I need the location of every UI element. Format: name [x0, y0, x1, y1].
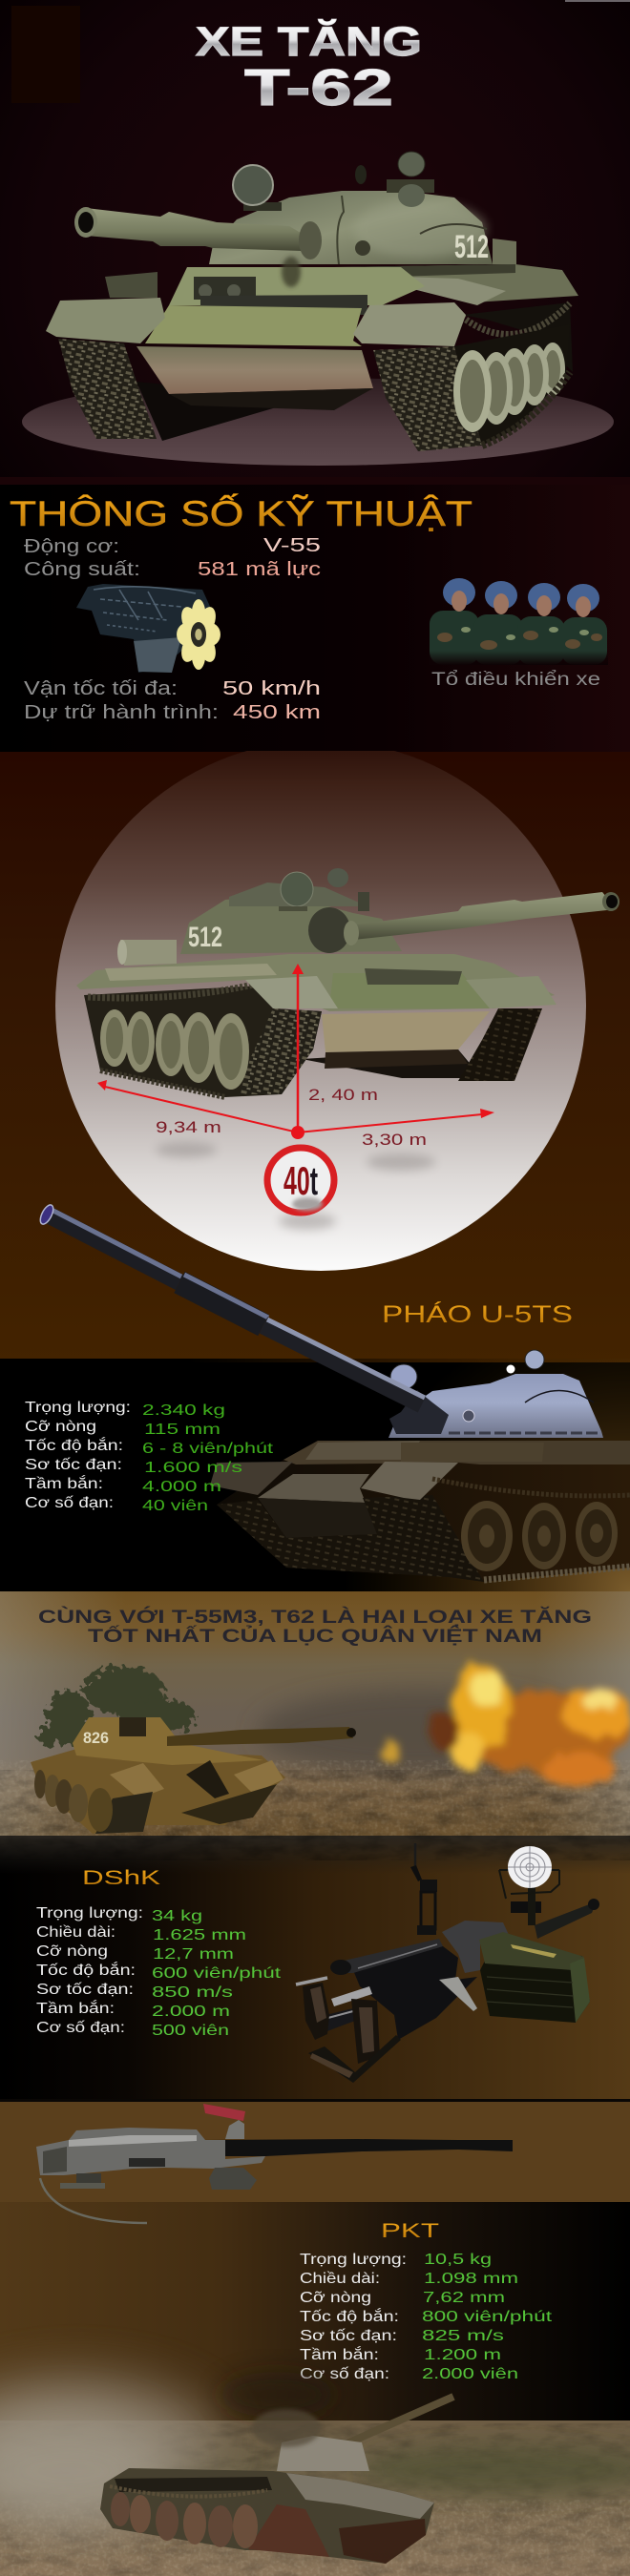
DShK labels: Tốc độ bắn:	[36, 1961, 136, 1979]
battle photo	[0, 1591, 630, 1836]
gun specs values: 4.000 m	[142, 1479, 221, 1495]
DShK values: 34 kg	[152, 1908, 202, 1924]
bottom photo	[0, 2372, 630, 2576]
DShK values: 12,7 mm	[153, 1946, 234, 1963]
gun specs labels: Sơ tốc đạn:	[25, 1457, 122, 1473]
tank with U-5TS gun	[210, 1350, 630, 1582]
PKT values	[422, 2252, 553, 2382]
caption: best tanks	[38, 1605, 592, 1647]
PKT labels: Tầm bắn:	[300, 2345, 379, 2363]
PKT values: 2.000 viên	[422, 2366, 518, 2382]
tank firing	[31, 1717, 356, 1834]
spec rows upper: 581 mã lực	[198, 559, 321, 580]
dimension labels: 2, 40 m	[308, 1086, 378, 1104]
panel: DShK	[0, 1836, 630, 2102]
dimension arrows	[97, 964, 494, 1139]
tank T-62 side view: 512	[188, 922, 222, 953]
dimension labels: 9,34 m	[156, 1118, 221, 1136]
PKT machine gun	[36, 2104, 513, 2223]
gun specs values: 6 - 8 viên/phút	[142, 1441, 274, 1457]
DShK labels	[36, 1905, 143, 2036]
DShK values: 1.625 mm	[153, 1927, 246, 1943]
tank T-62 front view: 512	[454, 229, 489, 265]
top right mark	[565, 0, 630, 2]
panel: dimensions background	[0, 752, 630, 1362]
PKT values: 1.098 mm	[424, 2271, 518, 2287]
gun specs values: 1.600 m/s	[144, 1460, 242, 1476]
icon: engine	[76, 584, 220, 673]
weight badge: 40t	[267, 1148, 334, 1213]
DShK values: 500 viên	[152, 2023, 229, 2039]
spec rows lower: Dự trữ hành trình:	[24, 702, 219, 723]
dimension labels	[156, 1086, 427, 1149]
PKT values: 7,62 mm	[423, 2290, 505, 2306]
background: header section	[0, 0, 630, 487]
PKT labels: Tốc độ bắn:	[300, 2307, 399, 2325]
DShK labels: Sơ tốc đạn:	[36, 1982, 134, 1998]
dimension shadows	[156, 1142, 435, 1230]
platform ellipse	[22, 378, 614, 466]
PKT values: 800 viên/phút	[422, 2309, 553, 2325]
spec rows lower: Vận tốc tối đa:	[24, 678, 178, 699]
gun specs values: 2.340 kg	[142, 1402, 225, 1419]
foliage on tank	[38, 1666, 196, 1748]
gun specs labels: Tầm bắn:	[25, 1474, 103, 1492]
spec rows upper: Động cơ:	[24, 536, 119, 557]
DShK values	[152, 1908, 282, 2039]
PKT labels: Sơ tốc đạn:	[300, 2328, 397, 2344]
PKT values: 825 m/s	[422, 2328, 504, 2344]
DShK values: 600 viên/phút	[152, 1965, 282, 1982]
title: XE TĂNG	[196, 19, 422, 65]
DShK machine gun	[296, 1843, 599, 2083]
caption: best tanks: TỐT NHẤT CỦA LỤC QUÂN VIỆT NAM	[88, 1624, 542, 1647]
tank firing: 826	[83, 1729, 109, 1747]
gun specs labels: Cỡ nòng	[25, 1419, 96, 1435]
tank T-62 side view	[76, 868, 620, 1097]
title: T-62	[244, 59, 393, 116]
PKT labels: Cơ số đạn:	[300, 2366, 389, 2382]
PKT labels	[300, 2252, 407, 2382]
decorative dark box top left	[11, 6, 80, 103]
DShK labels: Cỡ nòng	[36, 1943, 108, 1960]
smoke rising above photo	[0, 2376, 220, 2509]
icon: engine fan	[177, 599, 220, 670]
gun specs labels	[25, 1400, 131, 1511]
icon: gun sight	[508, 1846, 552, 1888]
dimension labels: 3,30 m	[362, 1131, 427, 1149]
heading: DShK: DShK	[82, 1867, 160, 1889]
DShK labels: Chiều dài:	[36, 1924, 116, 1941]
panel: gun dark overlay	[0, 1359, 630, 1591]
crew caption: Tổ điều khiển xe	[431, 670, 600, 690]
DShK labels: Trọng lượng:	[36, 1905, 143, 1922]
PKT values: 10,5 kg	[424, 2252, 492, 2268]
PKT labels: Cỡ nòng	[300, 2290, 371, 2306]
DShK values: 2.000 m	[152, 2004, 230, 2020]
gun specs labels: Cơ số đạn:	[25, 1495, 114, 1511]
caption: best tanks: CÙNG VỚI T-55M3, T62 LÀ HAI LOẠI XE TĂNG	[38, 1605, 592, 1628]
gun specs labels: Tốc độ bắn:	[25, 1436, 123, 1454]
panel: PKT	[0, 2099, 630, 2420]
gun specs labels: Trọng lượng:	[25, 1400, 131, 1416]
DShK values: 850 m/s	[152, 1984, 233, 2001]
oval spotlight	[55, 740, 586, 1271]
gun barrel	[38, 1203, 425, 1404]
spec rows lower	[24, 678, 321, 723]
PKT labels: Chiều dài:	[300, 2271, 380, 2287]
gun specs values: 40 viên	[142, 1498, 208, 1514]
spec rows upper	[24, 535, 321, 580]
tank T-62 front view	[46, 152, 578, 451]
tank driving	[100, 2397, 453, 2564]
title	[196, 19, 422, 116]
spec rows lower: 450 km	[233, 702, 321, 723]
PKT values: 1.200 m	[424, 2347, 501, 2363]
weight badge: 40t: 40t	[284, 1158, 318, 1203]
gun specs values	[142, 1402, 274, 1514]
gun panel corner glow	[344, 1359, 630, 1591]
gun specs values: 115 mm	[144, 1422, 220, 1438]
crew of four soldiers	[429, 578, 608, 665]
heading: U-5TS gun: PHÁO U-5TS	[382, 1300, 573, 1328]
explosion fire	[380, 1664, 630, 1787]
DShK labels: Cơ số đạn:	[36, 2020, 125, 2036]
panel: specifications	[0, 477, 630, 752]
PKT labels: Trọng lượng:	[300, 2252, 407, 2268]
heading: technical specs: THÔNG SỐ KỸ THUẬT	[10, 493, 472, 533]
spec rows lower: 50 km/h	[222, 678, 321, 699]
heading: PKT: PKT	[381, 2220, 439, 2242]
spec rows upper: V-55	[263, 535, 321, 556]
spec rows upper: Công suất:	[24, 559, 140, 580]
DShK labels: Tầm bắn:	[36, 1999, 115, 2017]
